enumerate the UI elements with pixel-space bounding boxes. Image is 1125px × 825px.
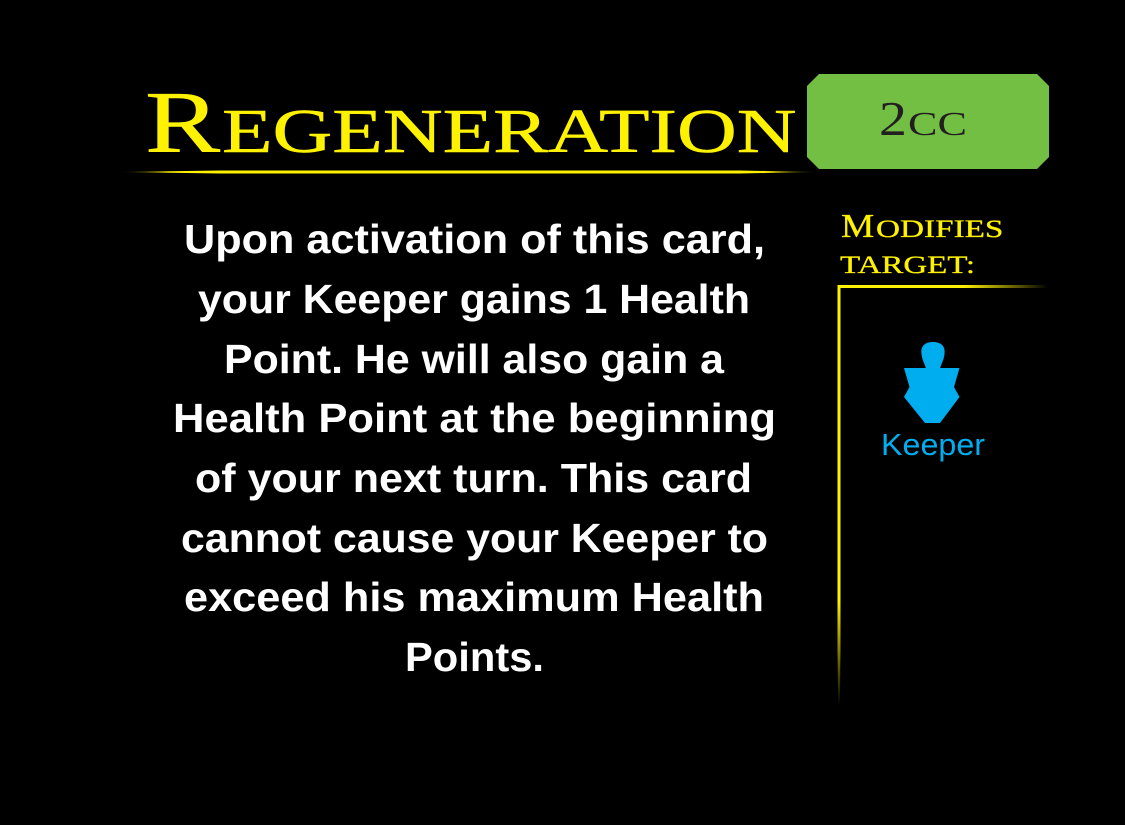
icon: keeper — [904, 342, 960, 423]
cost text: 2 — [879, 92, 907, 146]
title: EGENERATION — [222, 97, 797, 166]
title: R — [145, 74, 221, 171]
title underline — [120, 170, 818, 174]
keeper label: Keeper — [881, 427, 985, 462]
cost text: CC — [908, 105, 967, 143]
modifies target heading: TARGET: — [840, 252, 975, 279]
rules text: Health Point at the beginning — [173, 395, 776, 441]
rules text: your Keeper gains 1 Health — [198, 276, 750, 322]
cost text — [879, 92, 967, 146]
rules text: Points. — [405, 634, 544, 680]
title — [145, 74, 797, 171]
target panel frame — [838, 285, 1048, 706]
rules text: exceed his maximum Health — [184, 574, 764, 620]
rules text: Upon activation of this card, — [184, 216, 765, 262]
rules text — [173, 216, 776, 680]
modifies target heading: M — [841, 207, 874, 245]
rules text: of your next turn. This card — [195, 455, 752, 501]
modifies target heading — [840, 207, 1003, 279]
modifies target heading: ODIFIES — [876, 216, 1003, 243]
cost badge — [807, 74, 1049, 169]
rules text: cannot cause your Keeper to — [181, 515, 768, 561]
rules text: Point. He will also gain a — [224, 336, 725, 382]
